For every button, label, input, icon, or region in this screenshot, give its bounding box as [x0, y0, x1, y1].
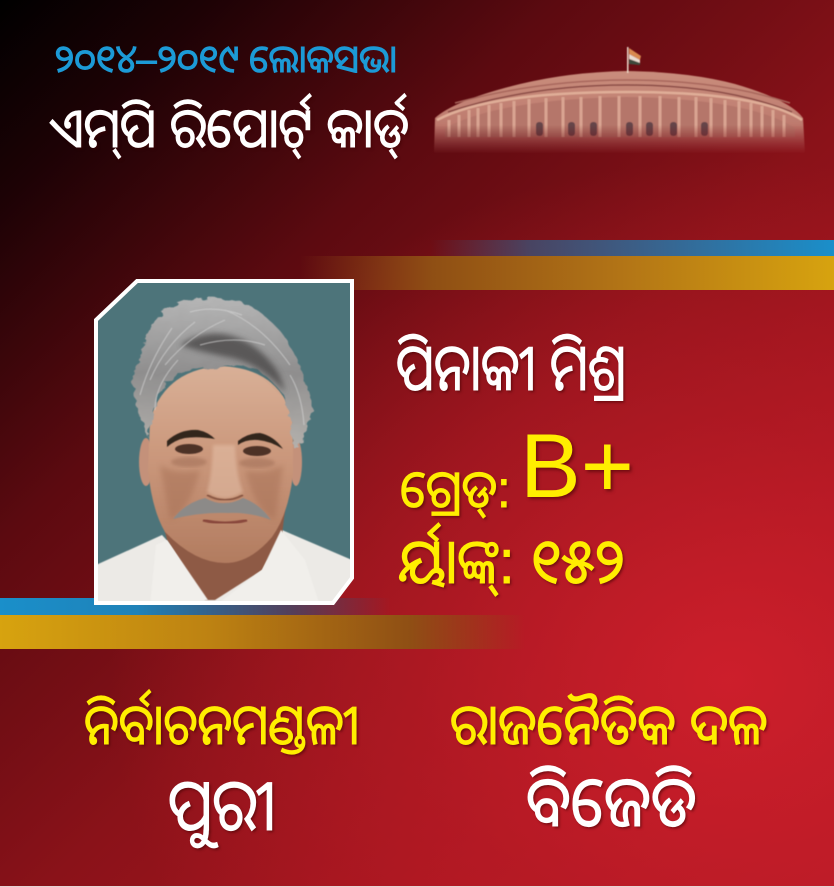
band: blue accent bottom left: [0, 598, 390, 615]
ears: [138, 438, 150, 486]
moustache: [173, 498, 271, 520]
eyebrows: [167, 430, 215, 447]
party name: ବିଜେଡି: [526, 763, 697, 841]
shirt: [98, 530, 350, 601]
title: MP report card: ଏମ୍‌ପି ରିପୋର୍ଟ୍ କାର୍ଡ୍: [50, 97, 409, 159]
constituency label: ନିର୍ବାଚନମଣ୍ଡଳୀ: [84, 693, 359, 756]
grade value: B+: [520, 416, 634, 517]
neck: [160, 510, 285, 600]
constituency name: ପୁରୀ: [168, 766, 275, 846]
band: gold accent bottom left: [0, 615, 525, 649]
band: blue accent top right: [430, 240, 834, 256]
band: gold accent top right: [300, 256, 834, 290]
hair: [132, 298, 312, 447]
hair shadow and strands: [180, 334, 285, 392]
grade label: ଗ୍ରେଡ୍:: [400, 461, 511, 519]
face shading: [161, 468, 199, 516]
party label: ରାଜନୈତିକ ଦଳ: [450, 693, 768, 756]
name: ପିନାକୀ ମିଶ୍ର: [396, 331, 626, 404]
face: [148, 366, 293, 563]
portrait photo in frame: [94, 279, 354, 605]
eyes: [175, 444, 203, 454]
heading: years and Lok Sabha: ୨୦୧୪–୨୦୧୯ ଲୋକସଭା: [54, 39, 397, 81]
nose: [207, 445, 243, 498]
rank: ର୍ୟାଙ୍କ୍: ୧୫୨: [398, 528, 626, 597]
illustration: parliament building: [434, 46, 805, 151]
